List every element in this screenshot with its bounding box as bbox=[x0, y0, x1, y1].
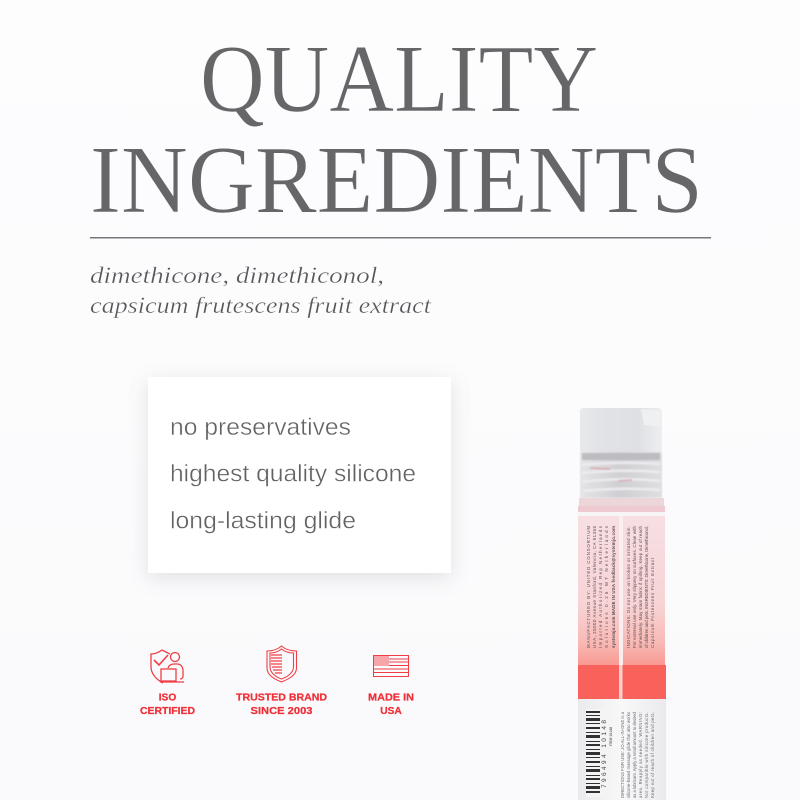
product bottle bbox=[578, 408, 666, 800]
label: made in USA: USA bbox=[380, 706, 402, 717]
upper label small print: USA, 25000 Avenue Stanford, Valencia, CA 91355 bbox=[592, 525, 597, 648]
benefit list bbox=[170, 414, 416, 534]
benefit list: highest quality silicone bbox=[170, 460, 416, 488]
label: ISO certified: CERTIFIED bbox=[140, 706, 195, 717]
red band bbox=[578, 665, 666, 699]
barcode bbox=[586, 709, 606, 797]
lower label small print: area. Reapply as needed. WARNING: bbox=[638, 712, 643, 798]
upper label small print: Capsicum Frutescens Fruit Extract bbox=[650, 557, 655, 648]
upper label small print: MANUFACTURED BY: UNITED CONSORTIUM bbox=[586, 526, 591, 648]
label: trusted brand: SINCE 2003 bbox=[250, 706, 313, 717]
lower label small print bbox=[609, 711, 655, 798]
icon: shield bbox=[267, 646, 296, 682]
icon: ISO certified bbox=[151, 650, 184, 683]
label: ISO certified bbox=[140, 692, 195, 717]
benefit list: long-lasting glide bbox=[170, 508, 356, 534]
barcode digits: 796494 10148 bbox=[601, 720, 608, 788]
upper label small print: systemjo.com MADE IN USA feedback@systemjo.com bbox=[611, 526, 616, 648]
bottle lower bbox=[578, 699, 666, 800]
lower label small print: as a lubricant. Apply a small amount to desired bbox=[632, 711, 637, 798]
upper label small print: Imported Authorized Rep Netherlands bbox=[598, 525, 603, 648]
lower label small print: silicone-based massage glide that also works bbox=[626, 712, 631, 798]
icon: US flag bbox=[374, 656, 408, 676]
upper label small print: immediately. May stain fabric if spilling. Keep out of reach bbox=[638, 525, 643, 648]
title: QUALITY bbox=[200, 25, 598, 132]
bottle label upper bbox=[578, 516, 665, 665]
upper label small print bbox=[586, 525, 655, 648]
bottle shoulder bbox=[579, 498, 664, 507]
ingredients text bbox=[90, 263, 432, 319]
heading rule bbox=[90, 237, 711, 238]
bottle cap bbox=[580, 408, 662, 452]
label: made in USA bbox=[368, 692, 414, 717]
title bbox=[90, 25, 703, 233]
lower label small print: Not compatible with silicone products. bbox=[644, 712, 649, 798]
upper label small print: of children and pets. INGREDIENTS: Dimethicone, Dimethiconol, bbox=[644, 526, 649, 648]
upper label small print: Solutions 0.25 WT Netherlands bbox=[604, 525, 609, 648]
ingredients text: capsicum frutescens fruit extract bbox=[90, 293, 432, 319]
lower label small print: DIRECTIONS FOR USE: JO ALL-IN-ONE is a bbox=[620, 711, 625, 798]
upper label small print: For external use only. Very slippery on surfaces. Clean with bbox=[632, 525, 637, 648]
label: made in USA: MADE IN bbox=[368, 692, 414, 704]
bottle neck bbox=[580, 452, 662, 498]
label: trusted brand: TRUSTED BRAND bbox=[236, 692, 327, 704]
title: INGREDIENTS bbox=[90, 126, 703, 233]
benefit list: no preservatives bbox=[170, 414, 351, 441]
panel: benefits bbox=[148, 377, 451, 573]
label: ISO certified: ISO bbox=[159, 692, 176, 704]
lower label small print: Keep out of reach of children and pets. bbox=[650, 712, 655, 798]
ingredients text: dimethicone, dimethiconol, bbox=[90, 263, 384, 289]
label: trusted brand bbox=[236, 692, 327, 717]
lower label small print: ITEM 10148 bbox=[609, 727, 613, 746]
upper label small print: INDICATIONS: Do not use on broken or irritated skin. bbox=[626, 526, 631, 648]
